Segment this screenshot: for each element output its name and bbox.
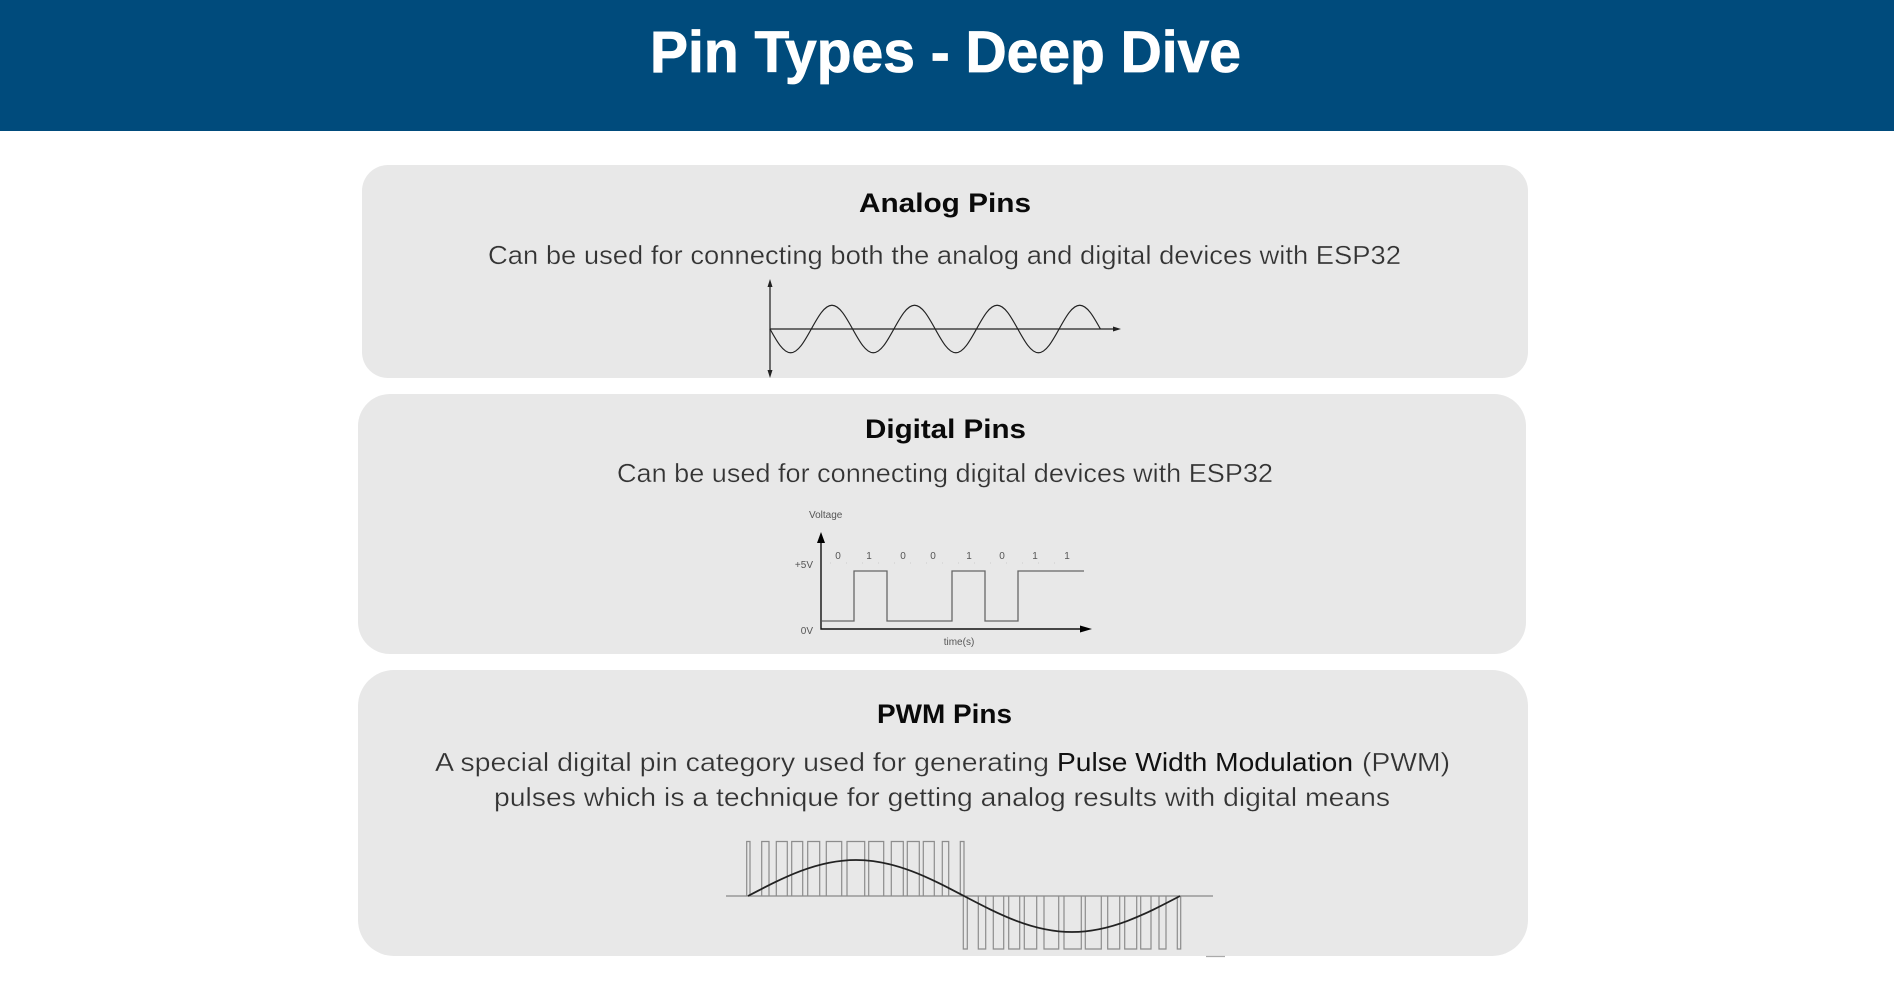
text: digital description: Can be used for connecting digital devices with ESP32 <box>617 458 1273 488</box>
chart: digital square wave: 1 <box>866 551 872 562</box>
text: analog description: Can be used for connecting both the analog and digital devices with ESP32 <box>488 240 1401 270</box>
chart: digital square wave: 1 <box>1064 551 1070 562</box>
text: pwm description: pulses which is a technique for getting analog results with digital means <box>494 782 1390 812</box>
text: pwm description: Pulse Width Modulation <box>1057 747 1353 777</box>
heading: digital pins: Digital Pins <box>865 414 1026 444</box>
chart: digital square wave: time(s) <box>944 637 974 648</box>
chart: digital square wave: 0V <box>801 626 813 637</box>
chart: digital square wave: +5V <box>795 560 813 571</box>
text: pwm description <box>435 747 1450 812</box>
text: pwm description: A special digital pin category used for generating <box>435 747 1049 777</box>
text: pwm description: (PWM) <box>1362 747 1450 777</box>
heading: analog pins: Analog Pins <box>859 188 1031 218</box>
chart: digital square wave: 1 <box>966 551 972 562</box>
chart: digital square wave: 0 <box>900 551 906 562</box>
panel: digital pins <box>358 394 1526 654</box>
chart: digital square wave: 0 <box>930 551 936 562</box>
chart: digital square wave <box>795 510 1092 648</box>
chart: digital square wave: Voltage <box>809 510 843 521</box>
panel: pwm pins <box>358 670 1528 956</box>
heading: pwm pins: PWM Pins <box>877 699 1012 729</box>
panel: analog pins <box>362 165 1528 378</box>
title: Pin Types - Deep Dive <box>650 20 1241 85</box>
chart: analog sine wave <box>768 279 1121 378</box>
chart: digital square wave: 0 <box>999 551 1005 562</box>
chart: digital square wave: 1 <box>1032 551 1038 562</box>
header banner <box>0 0 1894 131</box>
chart: pwm waveform <box>726 842 1225 956</box>
chart: digital square wave: 0 <box>835 551 841 562</box>
